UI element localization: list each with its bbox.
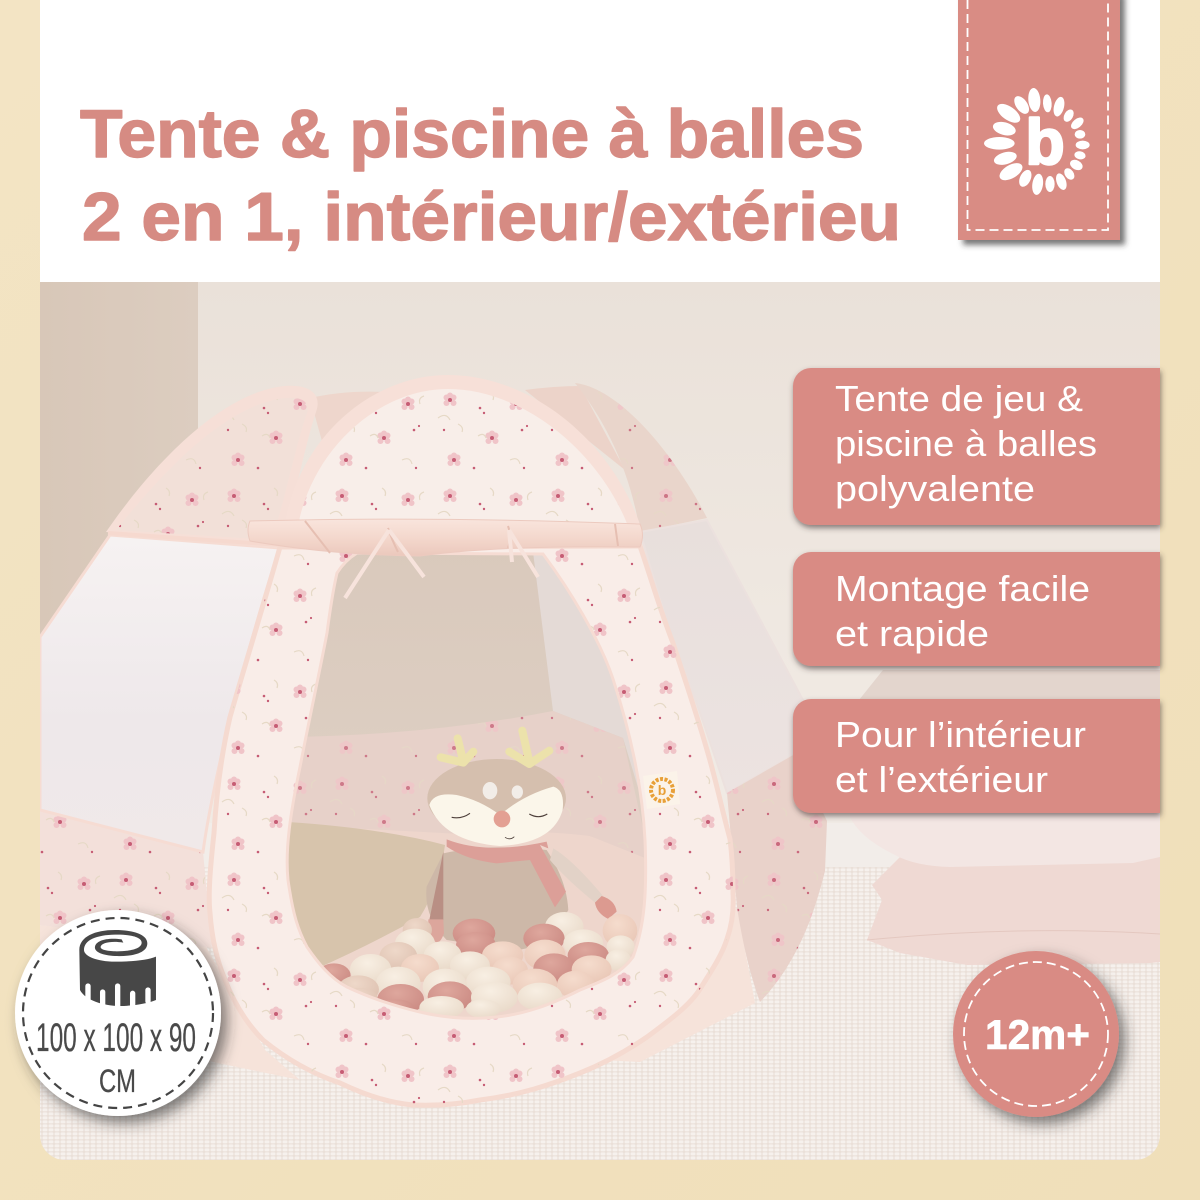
interior right mesh — [534, 556, 638, 786]
callout: easy setup: et rapide — [835, 613, 989, 654]
deer body — [426, 847, 568, 950]
tent: left top panel — [106, 386, 318, 548]
dimensions badge — [15, 910, 221, 1116]
plush deer — [426, 731, 617, 950]
age badge: 12m+ — [985, 1011, 1090, 1058]
deer scarf — [447, 839, 566, 907]
icon: sunflower logo: b — [1025, 106, 1065, 178]
dimensions text — [36, 1016, 196, 1099]
icon: measuring tape roll — [79, 930, 156, 1011]
deer head — [427, 759, 566, 816]
tent: ribbon ties — [345, 530, 538, 598]
callout: multipurpose — [793, 368, 1160, 525]
tent: centre top arch — [284, 375, 642, 530]
tent: front frame — [209, 546, 733, 1105]
white header panel — [40, 0, 1160, 300]
callout: multipurpose: piscine à balles — [835, 423, 1097, 464]
deer left arm — [428, 852, 444, 942]
tent: left lower panel — [40, 810, 212, 948]
deer spots and eyes — [452, 782, 547, 839]
dimensions text: CM — [99, 1063, 136, 1099]
tent: brand label: b — [658, 782, 666, 798]
deer right arm — [550, 849, 603, 902]
ball pile — [317, 912, 637, 1019]
skirting board — [203, 842, 900, 867]
title: Tente & piscine à balles — [80, 96, 864, 172]
callout: indoor outdoor: et l’extérieur — [835, 759, 1048, 800]
interior back — [308, 554, 642, 826]
tent opening and contents — [280, 540, 660, 1020]
beige cushion — [285, 822, 445, 968]
tent: right top panel — [575, 383, 707, 532]
title: 2 en 1, intérieur/extérieu — [82, 179, 901, 255]
callout: indoor outdoor: Pour l’intérieur — [835, 714, 1086, 755]
deer antlers — [441, 731, 549, 764]
callout: multipurpose: polyvalente — [835, 468, 1035, 509]
interior floral band — [290, 711, 650, 860]
rug — [40, 867, 1160, 1160]
callout: easy setup: Montage facile — [835, 568, 1090, 609]
interior floor — [324, 829, 644, 1017]
tent: pale base — [40, 907, 755, 1080]
room: back walls — [40, 282, 1160, 842]
dimensions text: 100 x 100 x 90 — [36, 1016, 196, 1060]
callout: easy setup — [793, 552, 1160, 666]
tent: right lower panel — [727, 754, 827, 1002]
tent: rolled door — [248, 519, 642, 556]
tent: rear panels — [310, 386, 625, 470]
tent: brand label — [649, 776, 675, 804]
pillows — [850, 670, 1160, 965]
tent: opening trim — [287, 553, 646, 1018]
brand tag with logo — [958, 0, 1120, 240]
photo: tent and ball pit — [40, 282, 1160, 1160]
tent: right mesh window — [640, 520, 803, 793]
tent: left mesh window — [40, 535, 280, 852]
callout: multipurpose: Tente de jeu & — [835, 378, 1083, 419]
age badge — [953, 951, 1119, 1117]
deer nose — [494, 811, 510, 827]
deer face — [429, 787, 563, 846]
icon: sunflower logo — [984, 88, 1090, 196]
title — [80, 96, 901, 255]
callout: indoor outdoor — [793, 699, 1160, 813]
